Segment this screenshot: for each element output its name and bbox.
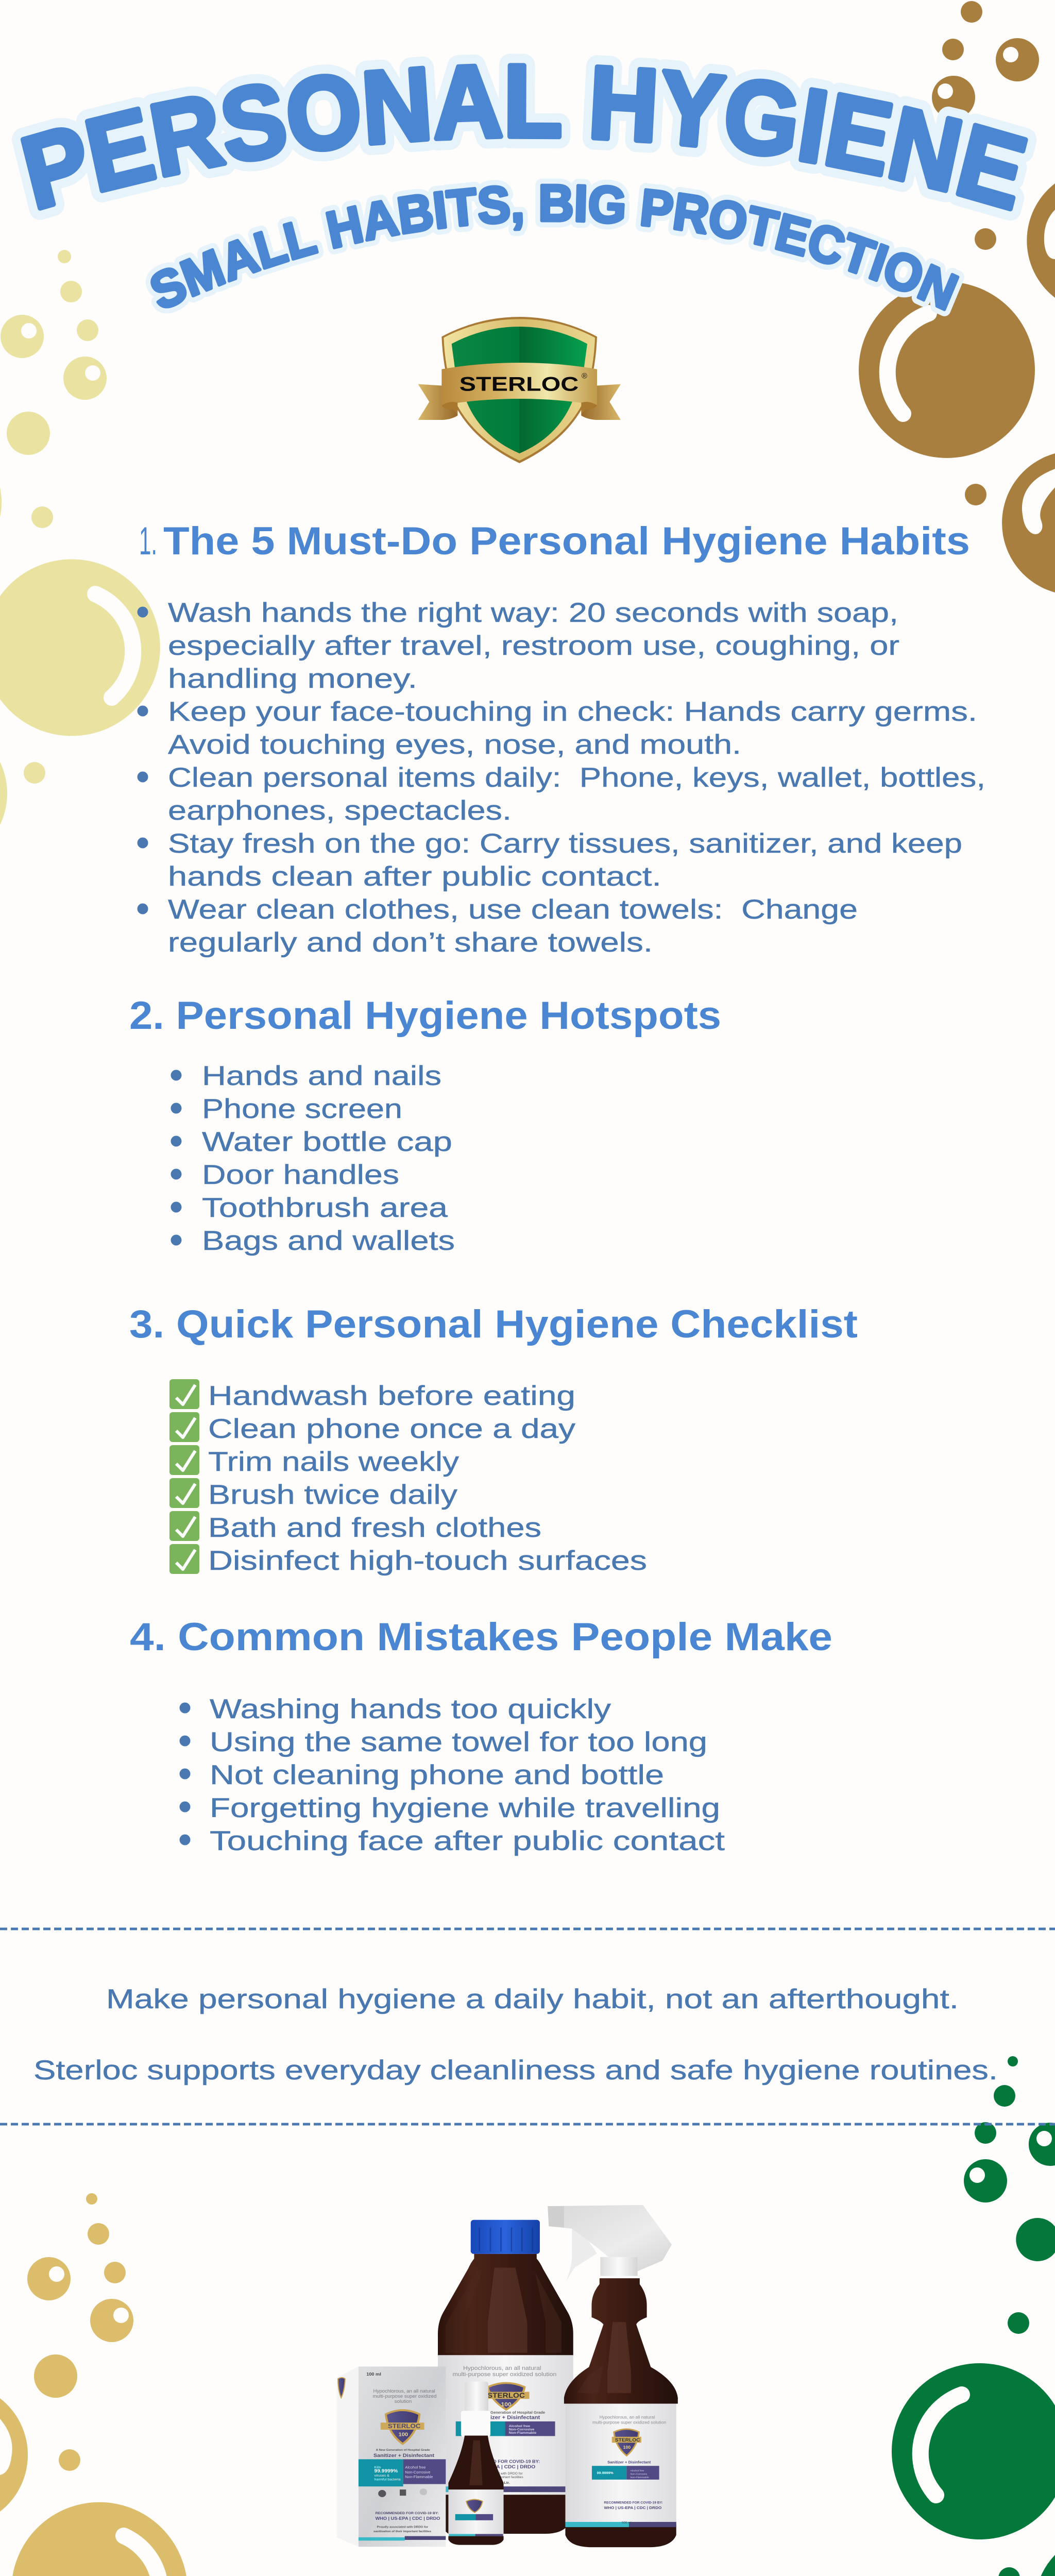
- carton box: 99.9999%: [375, 2469, 398, 2474]
- large bottle: Hypochlorous, an all natural: [463, 2365, 541, 2371]
- carton box: Non-Flammable: [405, 2475, 433, 2479]
- carton box: Kills: [375, 2466, 381, 2469]
- hotspot list: Door handles: [202, 1160, 399, 1190]
- ribbon band: [441, 363, 597, 416]
- carton box: Non-Corrosive: [405, 2470, 430, 2475]
- hotspot list: Toothbrush area: [202, 1193, 448, 1223]
- spray bottle: multi-purpose super oxidized solution: [592, 2420, 667, 2425]
- section 3: checklist: [129, 1302, 858, 1576]
- section 2: hotspots: [129, 994, 721, 1256]
- product photo: Sterloc bottles and box: [337, 2205, 678, 2547]
- checklist items: Handwash before eating: [208, 1381, 575, 1411]
- habit list: Wear clean clothes, use clean towels: Change: [168, 894, 858, 925]
- spray bottle: Hypochlorous, an all natural: [600, 2415, 655, 2419]
- heading 4: 4. Common Mistakes People Make: [130, 1615, 832, 1659]
- carton box: sanitization of their important facilities: [373, 2530, 431, 2533]
- hotspot list: Phone screen: [202, 1094, 402, 1124]
- spray bottle: Non-Corrosive: [630, 2473, 648, 2476]
- carton box: multi-purpose super oxidized: [372, 2394, 436, 2399]
- large bottle: Non-Corrosive: [509, 2428, 535, 2431]
- bullets: [171, 1070, 181, 1246]
- habit list: Stay fresh on the go: Carry tissues, sanitizer, and keep: [168, 828, 962, 859]
- bubbles: gold bottom left: [0, 2193, 188, 2576]
- habit list: handling money.: [168, 664, 417, 694]
- large bottle: multi-purpose super oxidized solution: [453, 2371, 556, 2378]
- heading 1: The 5 Must-Do Personal Hygiene Habits: [163, 519, 970, 563]
- spray bottle: [548, 2205, 678, 2547]
- spray bottle: WHO | US-EPA | CDC | DRDO: [604, 2505, 661, 2510]
- spray bottle: RECOMMENDED FOR COVID-19 BY:: [604, 2501, 663, 2505]
- large bottle: izer + Disinfectant: [490, 2415, 540, 2420]
- large bottle: ir important facilities: [493, 2476, 523, 2479]
- large bottle: 100: [501, 2401, 512, 2408]
- carton box: RECOMMENDED FOR COVID-19 BY:: [376, 2512, 439, 2515]
- habit list: Wash hands the right way: 20 seconds with soap,: [168, 598, 898, 628]
- carton box: 100: [398, 2432, 408, 2437]
- checklist items: Brush twice daily: [208, 1480, 458, 1510]
- carton box: harmful bacteria: [375, 2478, 401, 2482]
- checklist items: Clean phone once a day: [208, 1414, 576, 1444]
- ribbon tails: [418, 384, 621, 420]
- habit list: Avoid touching eyes, nose, and mouth.: [168, 730, 741, 760]
- carton box: viruses &: [375, 2474, 389, 2478]
- spray bottle: 99.9999%: [597, 2471, 614, 2475]
- section 4: mistakes: [130, 1615, 832, 1856]
- hotspot list: Hands and nails: [202, 1061, 441, 1091]
- heading number: 1.: [139, 519, 157, 563]
- habit list: Keep your face-touching in check: Hands carry germs.: [168, 697, 977, 727]
- checklist items: Disinfect high-touch surfaces: [208, 1546, 647, 1576]
- habit list: Clean personal items daily: Phone, keys, wallet, bottles,: [168, 762, 985, 793]
- habit list: especially after travel, restroom use, coughing, or: [168, 631, 899, 661]
- small spray bottle: [448, 2382, 504, 2545]
- mistakes list: Forgetting hygiene while travelling: [210, 1793, 720, 1823]
- spray bottle: 500 ml: [622, 2521, 631, 2524]
- carton box: A New Generation of Hospital Grade: [376, 2449, 430, 2452]
- carton box: Hypochlorous, an all natural: [373, 2388, 435, 2394]
- large bottle: Alcohol free: [509, 2425, 530, 2428]
- registered mark: ®: [582, 372, 587, 381]
- large bottle: ated with DRDO for: [493, 2472, 523, 2476]
- large bottle: STERLOC: [487, 2392, 525, 2400]
- heading 2: 2. Personal Hygiene Hotspots: [129, 994, 721, 1038]
- large bottle: D FOR COVID-19 BY:: [493, 2459, 540, 2464]
- habit list: regularly and don’t share towels.: [168, 927, 653, 958]
- large bottle: [438, 2220, 573, 2534]
- large bottle: Generation of Hospital Grade: [490, 2411, 545, 2415]
- carton box: [337, 2366, 446, 2547]
- carton box: Proudly associated with DRDO for: [377, 2526, 429, 2529]
- bullets: [179, 1702, 191, 1845]
- bullets: [137, 607, 148, 914]
- bubbles: brown top right: [859, 1, 1055, 592]
- carton box: 100 ml: [366, 2371, 381, 2377]
- large bottle: Non-Flammable: [509, 2431, 536, 2435]
- spray bottle: Alcohol free: [630, 2469, 644, 2472]
- checklist items: Bath and fresh clothes: [208, 1513, 541, 1543]
- heading 3: 3. Quick Personal Hygiene Checklist: [129, 1302, 858, 1346]
- checklist items: [208, 1381, 647, 1576]
- carton box: solution: [395, 2399, 412, 2404]
- checklist items: Trim nails weekly: [208, 1447, 460, 1477]
- subtitle: SMALL HABITS, BIG PROTECTION: [150, 183, 959, 311]
- title: PERSONAL HYGIENE: [12, 54, 1036, 221]
- bubbles: green right: [892, 2056, 1055, 2576]
- hotspot list: Water bottle cap: [202, 1127, 452, 1157]
- large bottle: PA | CDC | DRDO: [493, 2464, 536, 2470]
- habit list: earphones, spectacles.: [168, 795, 512, 826]
- carton box: STERLOC: [388, 2422, 420, 2430]
- closing message: [33, 1984, 998, 2086]
- spray bottle: STERLOC: [615, 2437, 640, 2443]
- large bottle: 1 Ltr.: [501, 2481, 510, 2485]
- logo: Sterloc shield: [418, 317, 621, 463]
- habit list: [168, 598, 985, 958]
- habit list: hands clean after public contact.: [168, 861, 661, 892]
- shield body: [441, 317, 597, 463]
- section 1: habits: [137, 519, 985, 958]
- mistakes list: Not cleaning phone and bottle: [210, 1760, 664, 1790]
- spray bottle: 100: [623, 2446, 631, 2450]
- logo wordmark: STERLOC: [460, 372, 578, 395]
- closing message: Sterloc supports everyday cleanliness and safe hygiene routines.: [33, 2055, 998, 2086]
- carton box: Alcohol free: [405, 2465, 426, 2470]
- spray bottle: Sanitizer + Disinfectant: [607, 2460, 651, 2465]
- mistakes list: [210, 1694, 725, 1856]
- bubbles: yellow left: [0, 250, 160, 825]
- mistakes list: Touching face after public contact: [210, 1826, 725, 1856]
- mistakes list: Washing hands too quickly: [210, 1694, 611, 1724]
- hotspot list: Bags and wallets: [202, 1226, 455, 1256]
- hotspot list: [202, 1061, 455, 1256]
- spray bottle: Non-Flammable: [630, 2476, 649, 2479]
- subtitle: SMALL HABITS, BIG PROTECTION: [145, 178, 964, 316]
- mistakes list: Using the same towel for too long: [210, 1727, 707, 1757]
- icons: green check boxes: [169, 1379, 199, 1574]
- closing message: Make personal hygiene a daily habit, not an afterthought.: [106, 1984, 959, 2014]
- carton box: WHO | US-EPA | CDC | DRDO: [376, 2516, 440, 2521]
- carton box: Sanitizer + Disinfectant: [373, 2453, 435, 2459]
- title: PERSONAL HYGIENE: [21, 63, 1028, 211]
